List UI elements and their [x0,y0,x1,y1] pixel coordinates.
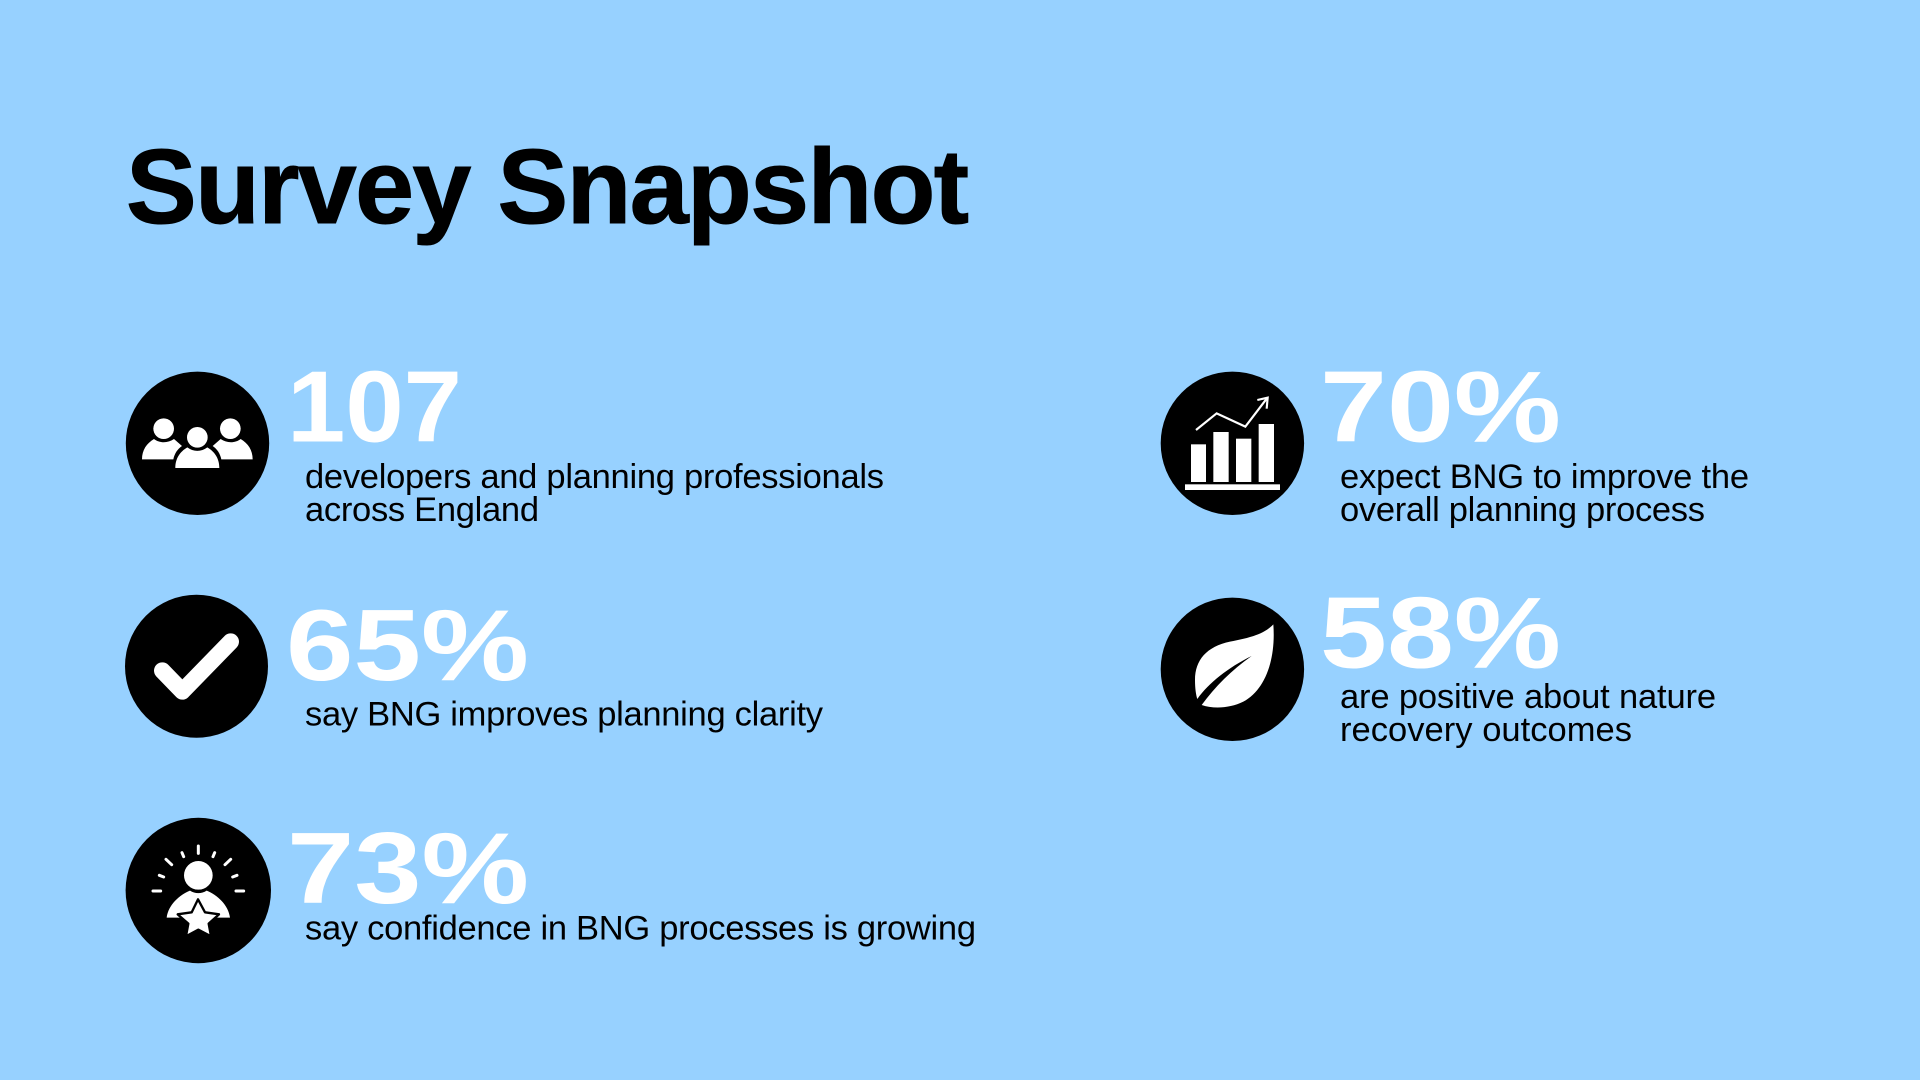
description: nature recovery: recovery outcomes [1340,711,1632,749]
description: nature recovery [1340,678,1716,749]
stat: 58%: 58% [1320,578,1561,690]
panel: 65% planning clarity [125,590,824,738]
description: nature recovery: are positive about nature [1340,678,1716,716]
icon: leaf [1161,598,1304,741]
icon: person with star [126,818,271,963]
description: planning process: overall planning process [1340,491,1705,529]
description: developers [305,458,884,529]
stat: 65%: 65% [286,590,529,702]
title: Survey Snapshot [126,128,969,246]
icon: people group [126,372,269,515]
description: confidence: say confidence in BNG processes is growing [305,910,976,948]
stat: 107: 107 [287,352,462,464]
panel: 58% nature recovery [1161,578,1716,749]
icon: check mark [125,595,268,738]
stat: 70%: 70% [1320,352,1561,464]
description: developers: developers and planning professionals [305,458,884,496]
panel: 73% confidence [126,813,976,963]
description: planning process: expect BNG to improve the [1340,458,1749,496]
stat: 73%: 73% [287,813,529,925]
description: planning clarity: say BNG improves planning clarity [305,696,824,734]
description: planning process [1340,458,1749,529]
description: developers: across England [305,491,539,529]
icon: bar chart with rising arrow [1161,372,1304,515]
panel: 107 developers [126,352,884,529]
panel: 70% planning process [1161,352,1749,529]
